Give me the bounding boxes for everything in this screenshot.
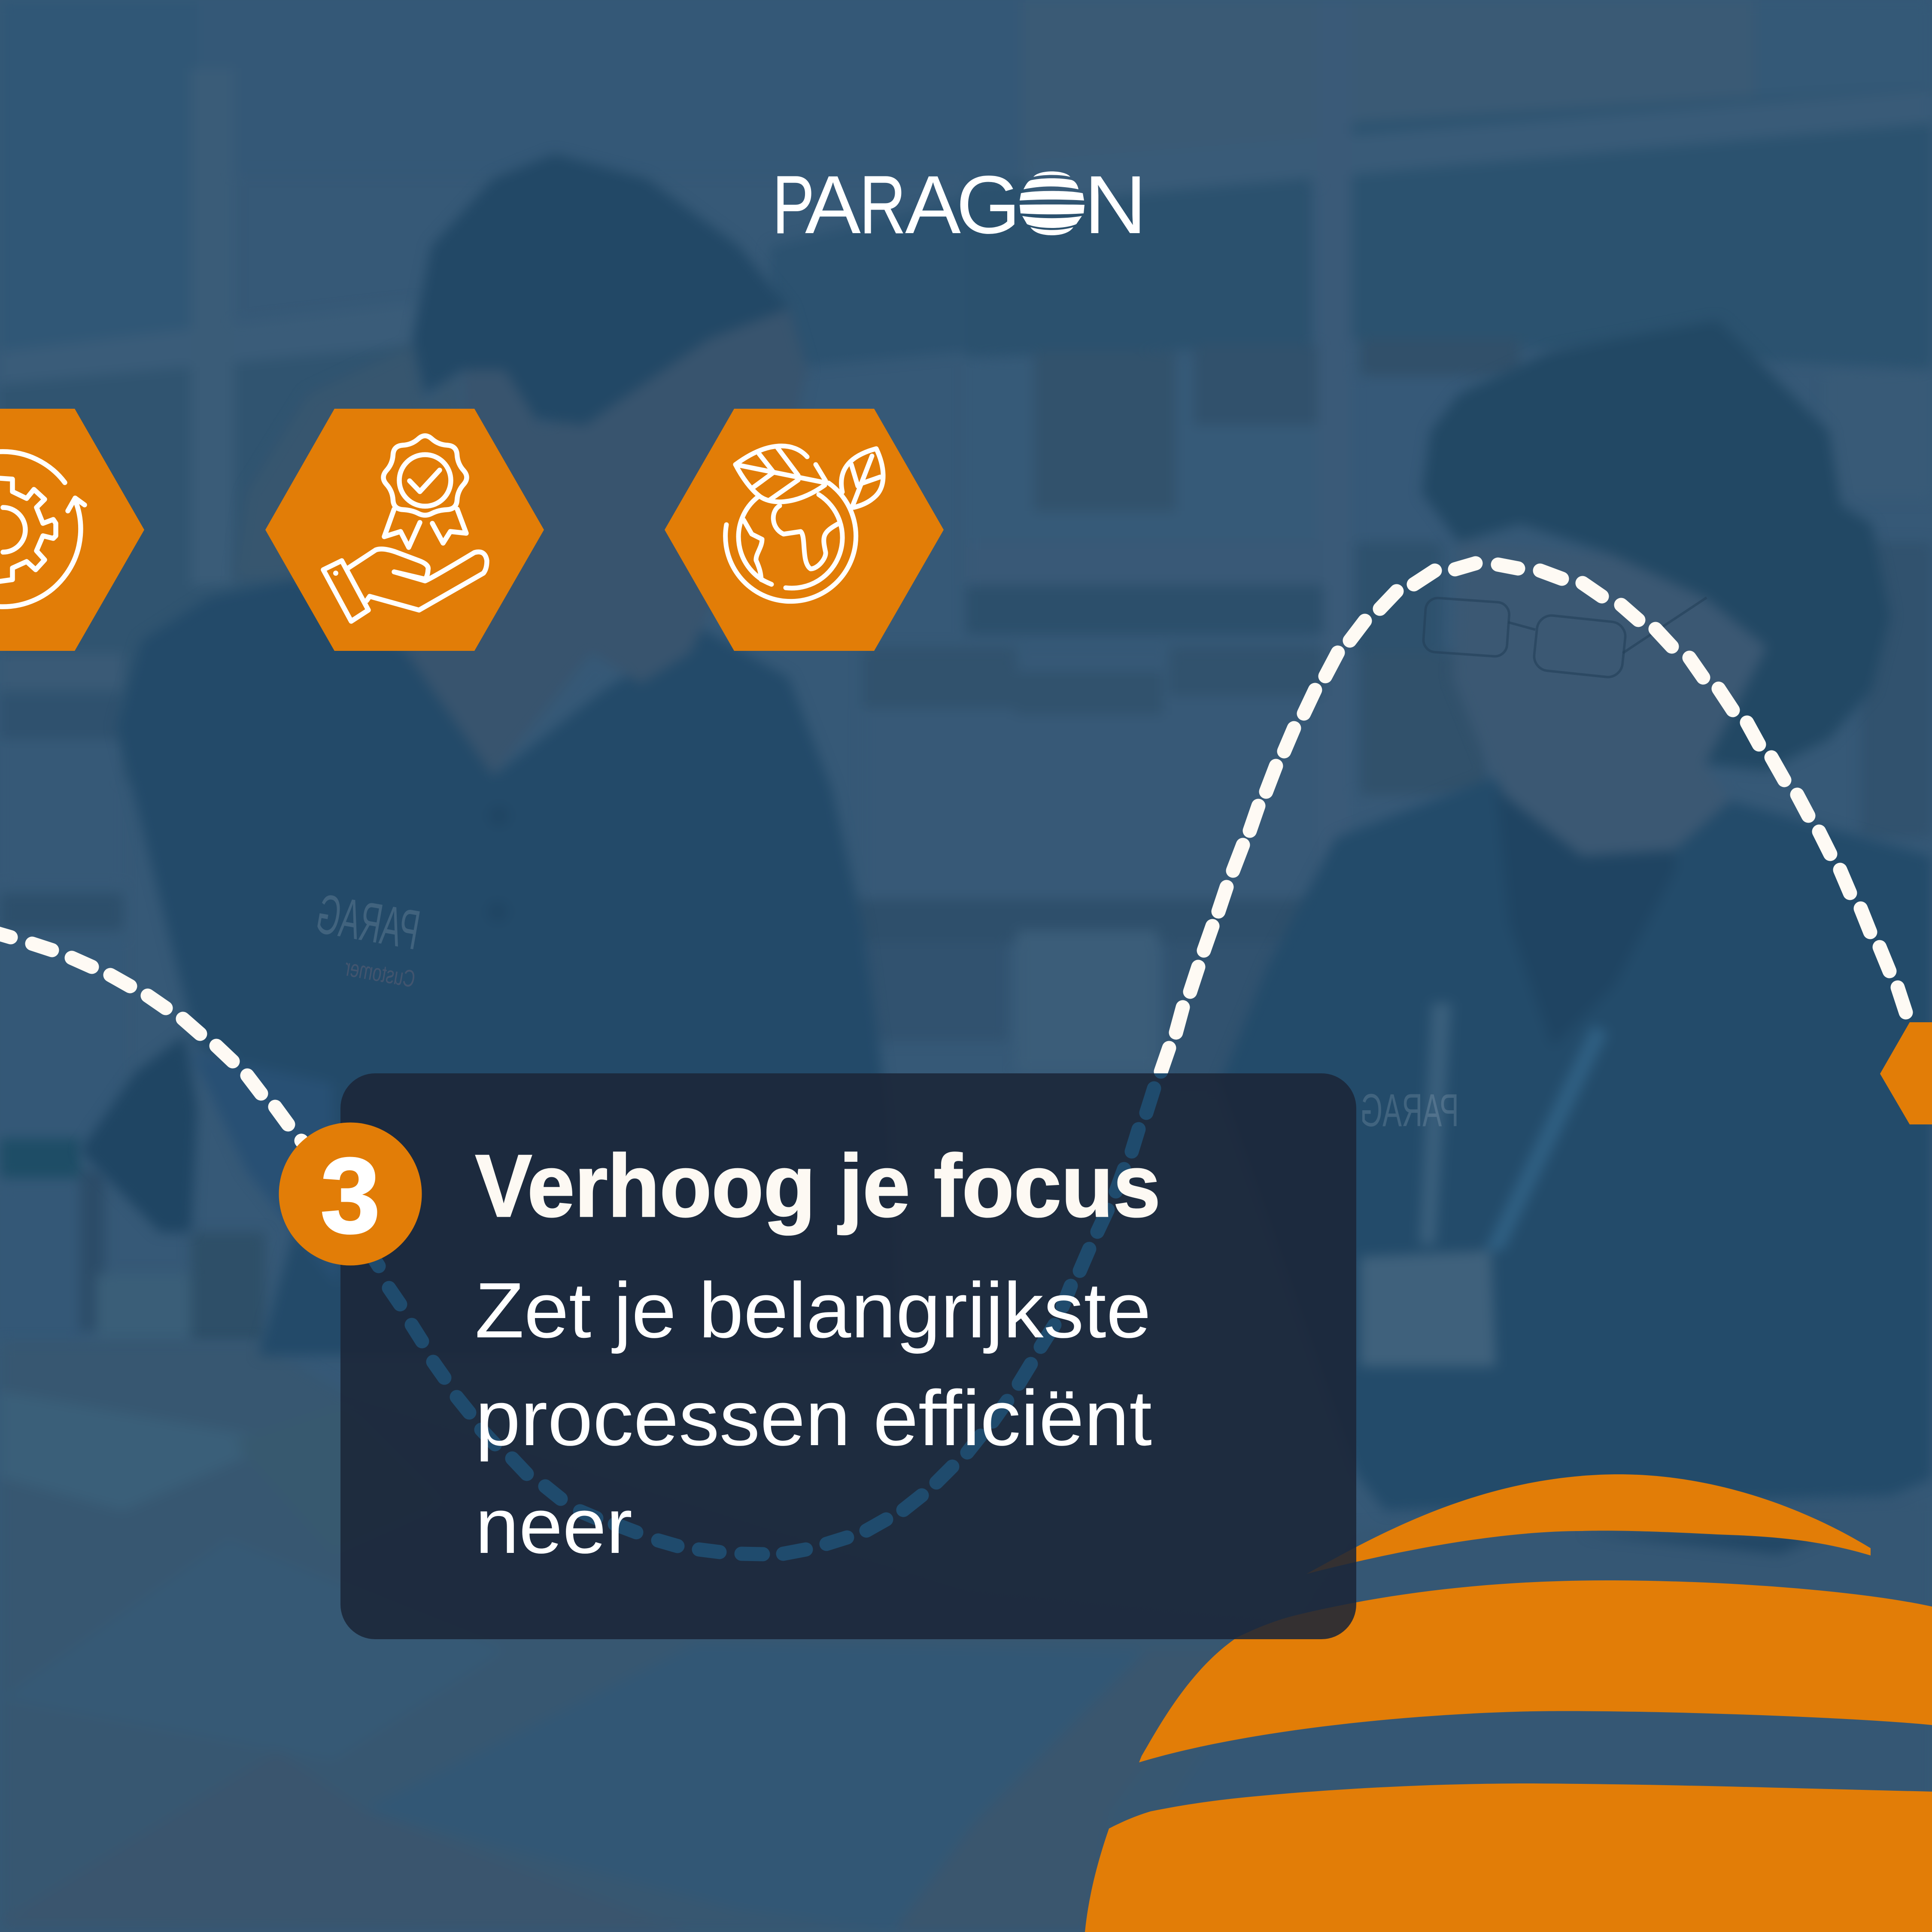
- wave crest: [1306, 1474, 1871, 1574]
- left colleague: [80, 154, 899, 1355]
- heading: Verhoog je focus: [475, 1136, 1160, 1235]
- orange wave shapes: [1085, 1474, 1932, 1932]
- body text: Zet je belangrijkste: [475, 1266, 1151, 1354]
- wave middle: [1139, 1580, 1932, 1762]
- logo letters: [772, 158, 1147, 251]
- body text: [475, 1266, 1152, 1570]
- step number badge: [279, 1122, 422, 1266]
- table with papers: [0, 1342, 1932, 1932]
- logo letters: G: [956, 158, 1021, 251]
- wave bottom: [1085, 1783, 1932, 1932]
- logo letters: A: [805, 158, 861, 251]
- logo: PARAGON: [772, 158, 1147, 251]
- hexagon icons row: [0, 409, 944, 651]
- icon: globe with leaves: [665, 409, 944, 651]
- cuff button: [333, 571, 338, 576]
- logo striped globe: [1020, 171, 1084, 235]
- shirt logo right: PARAG: [1360, 1084, 1459, 1136]
- logo letters: N: [1084, 158, 1147, 251]
- right colleague: [1220, 320, 1932, 1554]
- icon: gear with cycle arrow: [0, 409, 144, 651]
- logo letters: R: [860, 158, 906, 251]
- text panel: [340, 1073, 1356, 1639]
- glasses: [1423, 597, 1707, 678]
- shirt logo left: PARAG: [312, 882, 424, 962]
- dashed route line outside panel: [0, 563, 1906, 1155]
- dashed route line inside panel: [371, 1048, 1169, 1554]
- body text: neer: [475, 1482, 632, 1570]
- shelving: [0, 0, 1932, 1343]
- logo letters: A: [905, 158, 961, 251]
- icon: hand holding quality badge: [265, 409, 544, 651]
- body text: processen efficiënt: [475, 1374, 1152, 1462]
- hexagon partial at right edge: [1880, 1022, 1932, 1124]
- shirt text left: Customer: [343, 954, 417, 993]
- step number badge: 3: [320, 1136, 380, 1255]
- logo letters: P: [772, 158, 814, 251]
